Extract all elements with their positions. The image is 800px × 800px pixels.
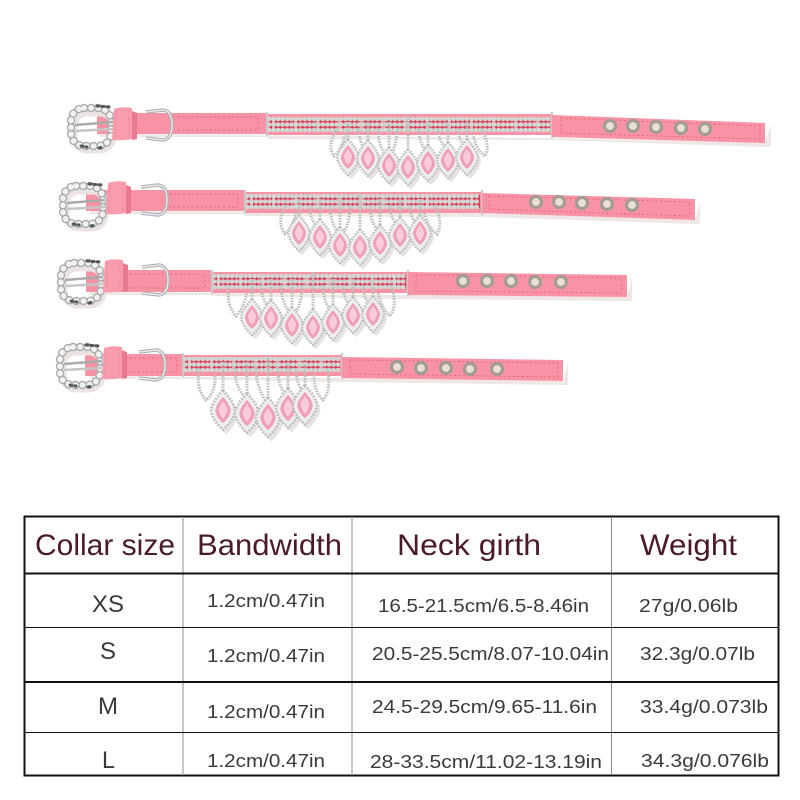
row S: 32.3g/0.07lb	[640, 644, 755, 664]
collar: size M	[61, 259, 632, 349]
row M: 1.2cm/0.47in	[207, 702, 325, 722]
row L	[102, 747, 769, 774]
collar: size XS	[71, 106, 771, 189]
table header: Collar size	[35, 529, 175, 562]
keeper loop	[112, 107, 137, 140]
collar shadow	[90, 278, 632, 301]
eyelets	[458, 276, 566, 288]
size table	[24, 516, 778, 776]
eyelets	[604, 120, 710, 134]
strap stitching	[130, 274, 205, 288]
row XS: 16.5-21.5cm/6.5-8.46in	[378, 596, 589, 616]
right strap stitching	[489, 196, 690, 216]
keeper loop	[102, 346, 127, 379]
strap stitching	[125, 358, 177, 372]
rhinestone band	[245, 190, 482, 215]
right strap stitching	[416, 275, 622, 293]
strap stitching	[165, 194, 238, 207]
crystal drops	[211, 385, 320, 441]
row XS: 27g/0.06lb	[639, 596, 738, 616]
hanging chains	[228, 272, 394, 316]
row XS: 1.2cm/0.47in	[207, 591, 325, 611]
left strap	[97, 113, 267, 134]
row S: 20.5-25.5cm/8.07-10.04in	[372, 644, 609, 664]
left strap	[86, 270, 212, 292]
right strap stitching	[350, 360, 558, 377]
D ring	[146, 110, 172, 140]
buckle	[63, 184, 105, 228]
right strap	[552, 115, 765, 143]
row XS	[92, 591, 738, 618]
row XS: XS	[92, 591, 124, 618]
D ring	[139, 350, 165, 380]
eyelets	[392, 362, 502, 374]
keeper loop	[103, 259, 128, 292]
D ring	[142, 265, 168, 295]
hanging chains	[281, 193, 440, 234]
table header	[35, 529, 738, 562]
rhinestone band	[267, 112, 552, 138]
left strap	[86, 190, 245, 211]
table header: Neck girth	[397, 529, 541, 562]
rhinestone band	[183, 353, 342, 379]
row M	[98, 693, 768, 722]
right strap	[342, 357, 563, 381]
left strap	[85, 354, 183, 376]
row M: 24.5-29.5cm/9.65-11.6in	[372, 697, 597, 717]
crystal drops	[241, 296, 387, 349]
row L: 28-33.5cm/11.02-13.19in	[370, 752, 602, 772]
row L: 34.3g/0.076lb	[641, 751, 769, 771]
row M: M	[98, 693, 118, 720]
row L: 1.2cm/0.47in	[207, 751, 325, 771]
buckle	[61, 261, 103, 305]
table header: Weight	[640, 529, 738, 562]
hanging chains	[198, 356, 329, 400]
keeper loop	[106, 181, 131, 214]
right strap	[482, 193, 695, 220]
row M: 33.4g/0.073lb	[640, 697, 768, 717]
row S: S	[100, 638, 116, 665]
table header: Bandwidth	[197, 529, 342, 562]
row S	[100, 638, 755, 666]
right strap	[408, 272, 627, 297]
table grid	[24, 516, 778, 776]
right strap stitching	[561, 118, 760, 139]
collar: size L	[60, 345, 568, 441]
row S: 1.2cm/0.47in	[207, 646, 325, 666]
rhinestone band	[212, 270, 408, 296]
collar shadow	[90, 202, 700, 224]
buckle	[71, 106, 113, 150]
buckle	[60, 345, 102, 389]
collar shadow	[100, 125, 771, 147]
eyelets	[530, 196, 638, 210]
strap stitching	[178, 117, 258, 130]
crystal drops	[288, 215, 434, 269]
collar shadow	[90, 363, 568, 385]
D ring	[141, 185, 167, 215]
hanging chains	[331, 116, 487, 156]
crystal drops	[337, 139, 481, 189]
collar: size S	[63, 181, 700, 269]
row L: L	[102, 747, 115, 774]
